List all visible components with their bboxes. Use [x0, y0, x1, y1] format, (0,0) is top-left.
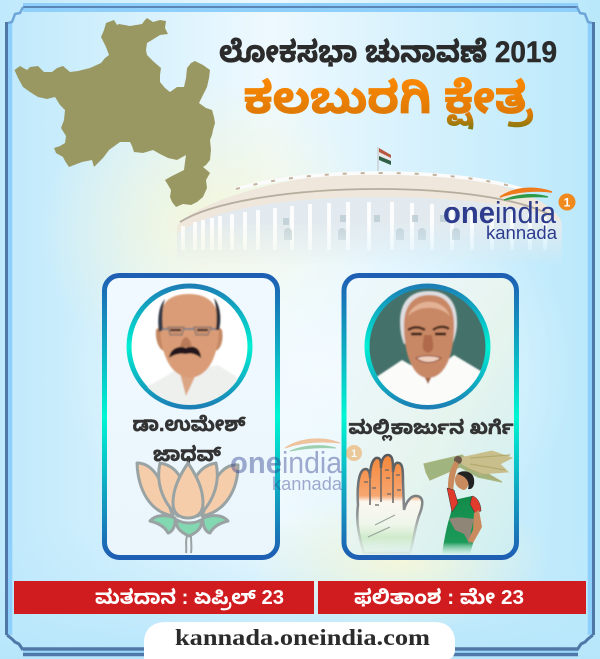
portrait: Mallikarjun Kharge: [367, 286, 488, 410]
watermark: oneindia kannada logo: kannada: [272, 474, 343, 494]
title line 1: ಲೋಕಸಭಾ ಚುನಾವಣೆ 2019: [219, 36, 557, 69]
oneindia kannada logo: [443, 188, 576, 243]
oneindia kannada logo: 1: [564, 196, 571, 210]
icon: Congress hand: [357, 455, 422, 553]
candidate name second line: ಜಾಧವ್: [153, 444, 221, 466]
title line 2: ಕಲಬುರಗಿ ಕ್ಷೇತ್ರ: [244, 74, 534, 130]
watermark: oneindia kannada logo: 1: [351, 448, 357, 460]
watermark: oneindia kannada logo: one: [230, 445, 282, 480]
icon: farmer woman with grain (JDS): [424, 451, 512, 554]
banner: result date: [318, 581, 586, 614]
panel: candidate Mallikarjun Kharge: [344, 276, 516, 558]
icon: BJP lotus: [137, 463, 238, 553]
candidate name: ಮಲ್ಲಿಕಾರ್ಜುನ ಖರ್ಗೆ: [348, 418, 514, 441]
watermark: oneindia kannada logo: india: [282, 445, 343, 480]
website pill: kannada.oneindia.com: [175, 625, 430, 650]
panel: candidate Umesh Jadhav: [104, 276, 278, 558]
oneindia kannada logo: one: [443, 195, 495, 230]
portrait: Umesh Jadhav: [129, 286, 250, 410]
website pill: [144, 622, 455, 659]
watermark: oneindia kannada logo: [230, 439, 362, 494]
banner: result date: ಫಲಿತಾಂಶ : ಮೇ 23: [354, 587, 524, 609]
map of Kalaburagi constituency: [14, 18, 215, 207]
parliament building illustration: [177, 147, 562, 255]
banner: polling date: ಮತದಾನ : ಏಪ್ರಿಲ್ 23: [95, 587, 284, 611]
oneindia kannada logo: india: [495, 195, 557, 230]
candidate name: ಡಾ.ಉಮೇಶ್: [132, 414, 246, 436]
oneindia kannada logo: kannada: [486, 223, 558, 243]
banner: polling date: [14, 581, 314, 614]
